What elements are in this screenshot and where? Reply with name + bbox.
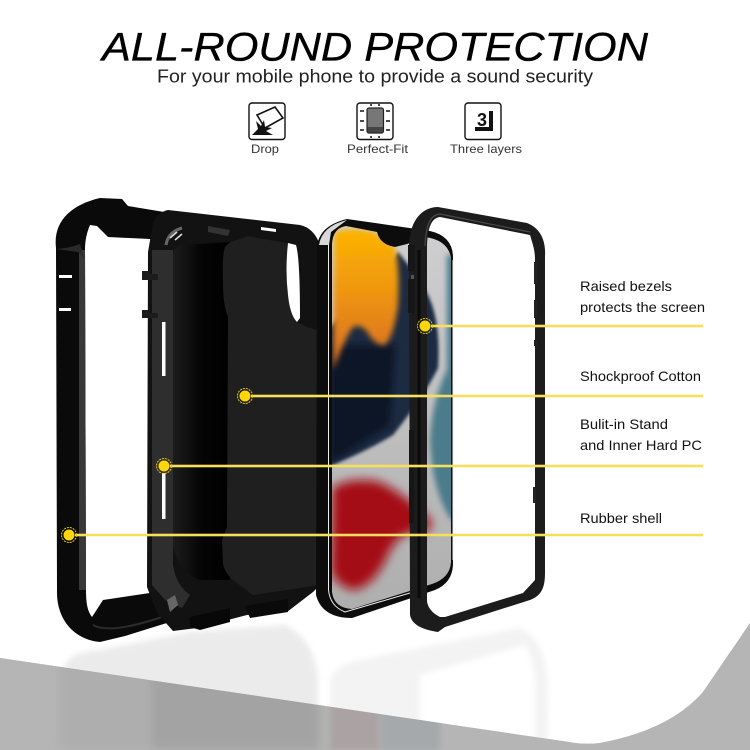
raised bezel frame (408, 207, 545, 632)
grey floor shape (0, 623, 750, 750)
subtitle: For your mobile phone to provide a sound security (157, 66, 593, 86)
label: drop: Drop (251, 142, 279, 156)
phone screen wallpaper (332, 226, 451, 609)
icon: perfect-fit (357, 103, 393, 140)
label: raised bezels (580, 278, 705, 315)
callout line: built-in stand (156, 458, 703, 474)
label: built-in stand: Bulit-in Stand (580, 416, 668, 432)
rubber shell (56, 198, 170, 642)
label: shockproof cotton: Shockproof Cotton (580, 368, 701, 384)
hard PC inner case (142, 210, 320, 631)
label: built-in stand: and Inner Hard PC (580, 437, 702, 453)
title: ALL-ROUND PROTECTION (100, 26, 648, 70)
callout line: raised bezels (418, 318, 703, 334)
window cutout in inner case (286, 243, 300, 322)
icon: three layers (465, 103, 501, 140)
icon: three layers: 3 (477, 110, 487, 130)
callout line: rubber shell (62, 528, 703, 542)
phone edge highlights (328, 245, 453, 612)
callout line: shockproof cotton (238, 388, 703, 404)
floor reflection of the case (0, 625, 750, 750)
label: raised bezels: protects the screen (580, 299, 705, 315)
label: raised bezels: Raised bezels (580, 278, 672, 294)
icon: drop (249, 103, 285, 140)
label: three layers: Three layers (450, 142, 522, 156)
phone (316, 215, 460, 618)
label: built-in stand (580, 416, 702, 453)
label: perfect-fit: Perfect-Fit (347, 142, 409, 156)
label: rubber shell: Rubber shell (580, 510, 662, 526)
shockproof cotton foam (222, 236, 317, 595)
